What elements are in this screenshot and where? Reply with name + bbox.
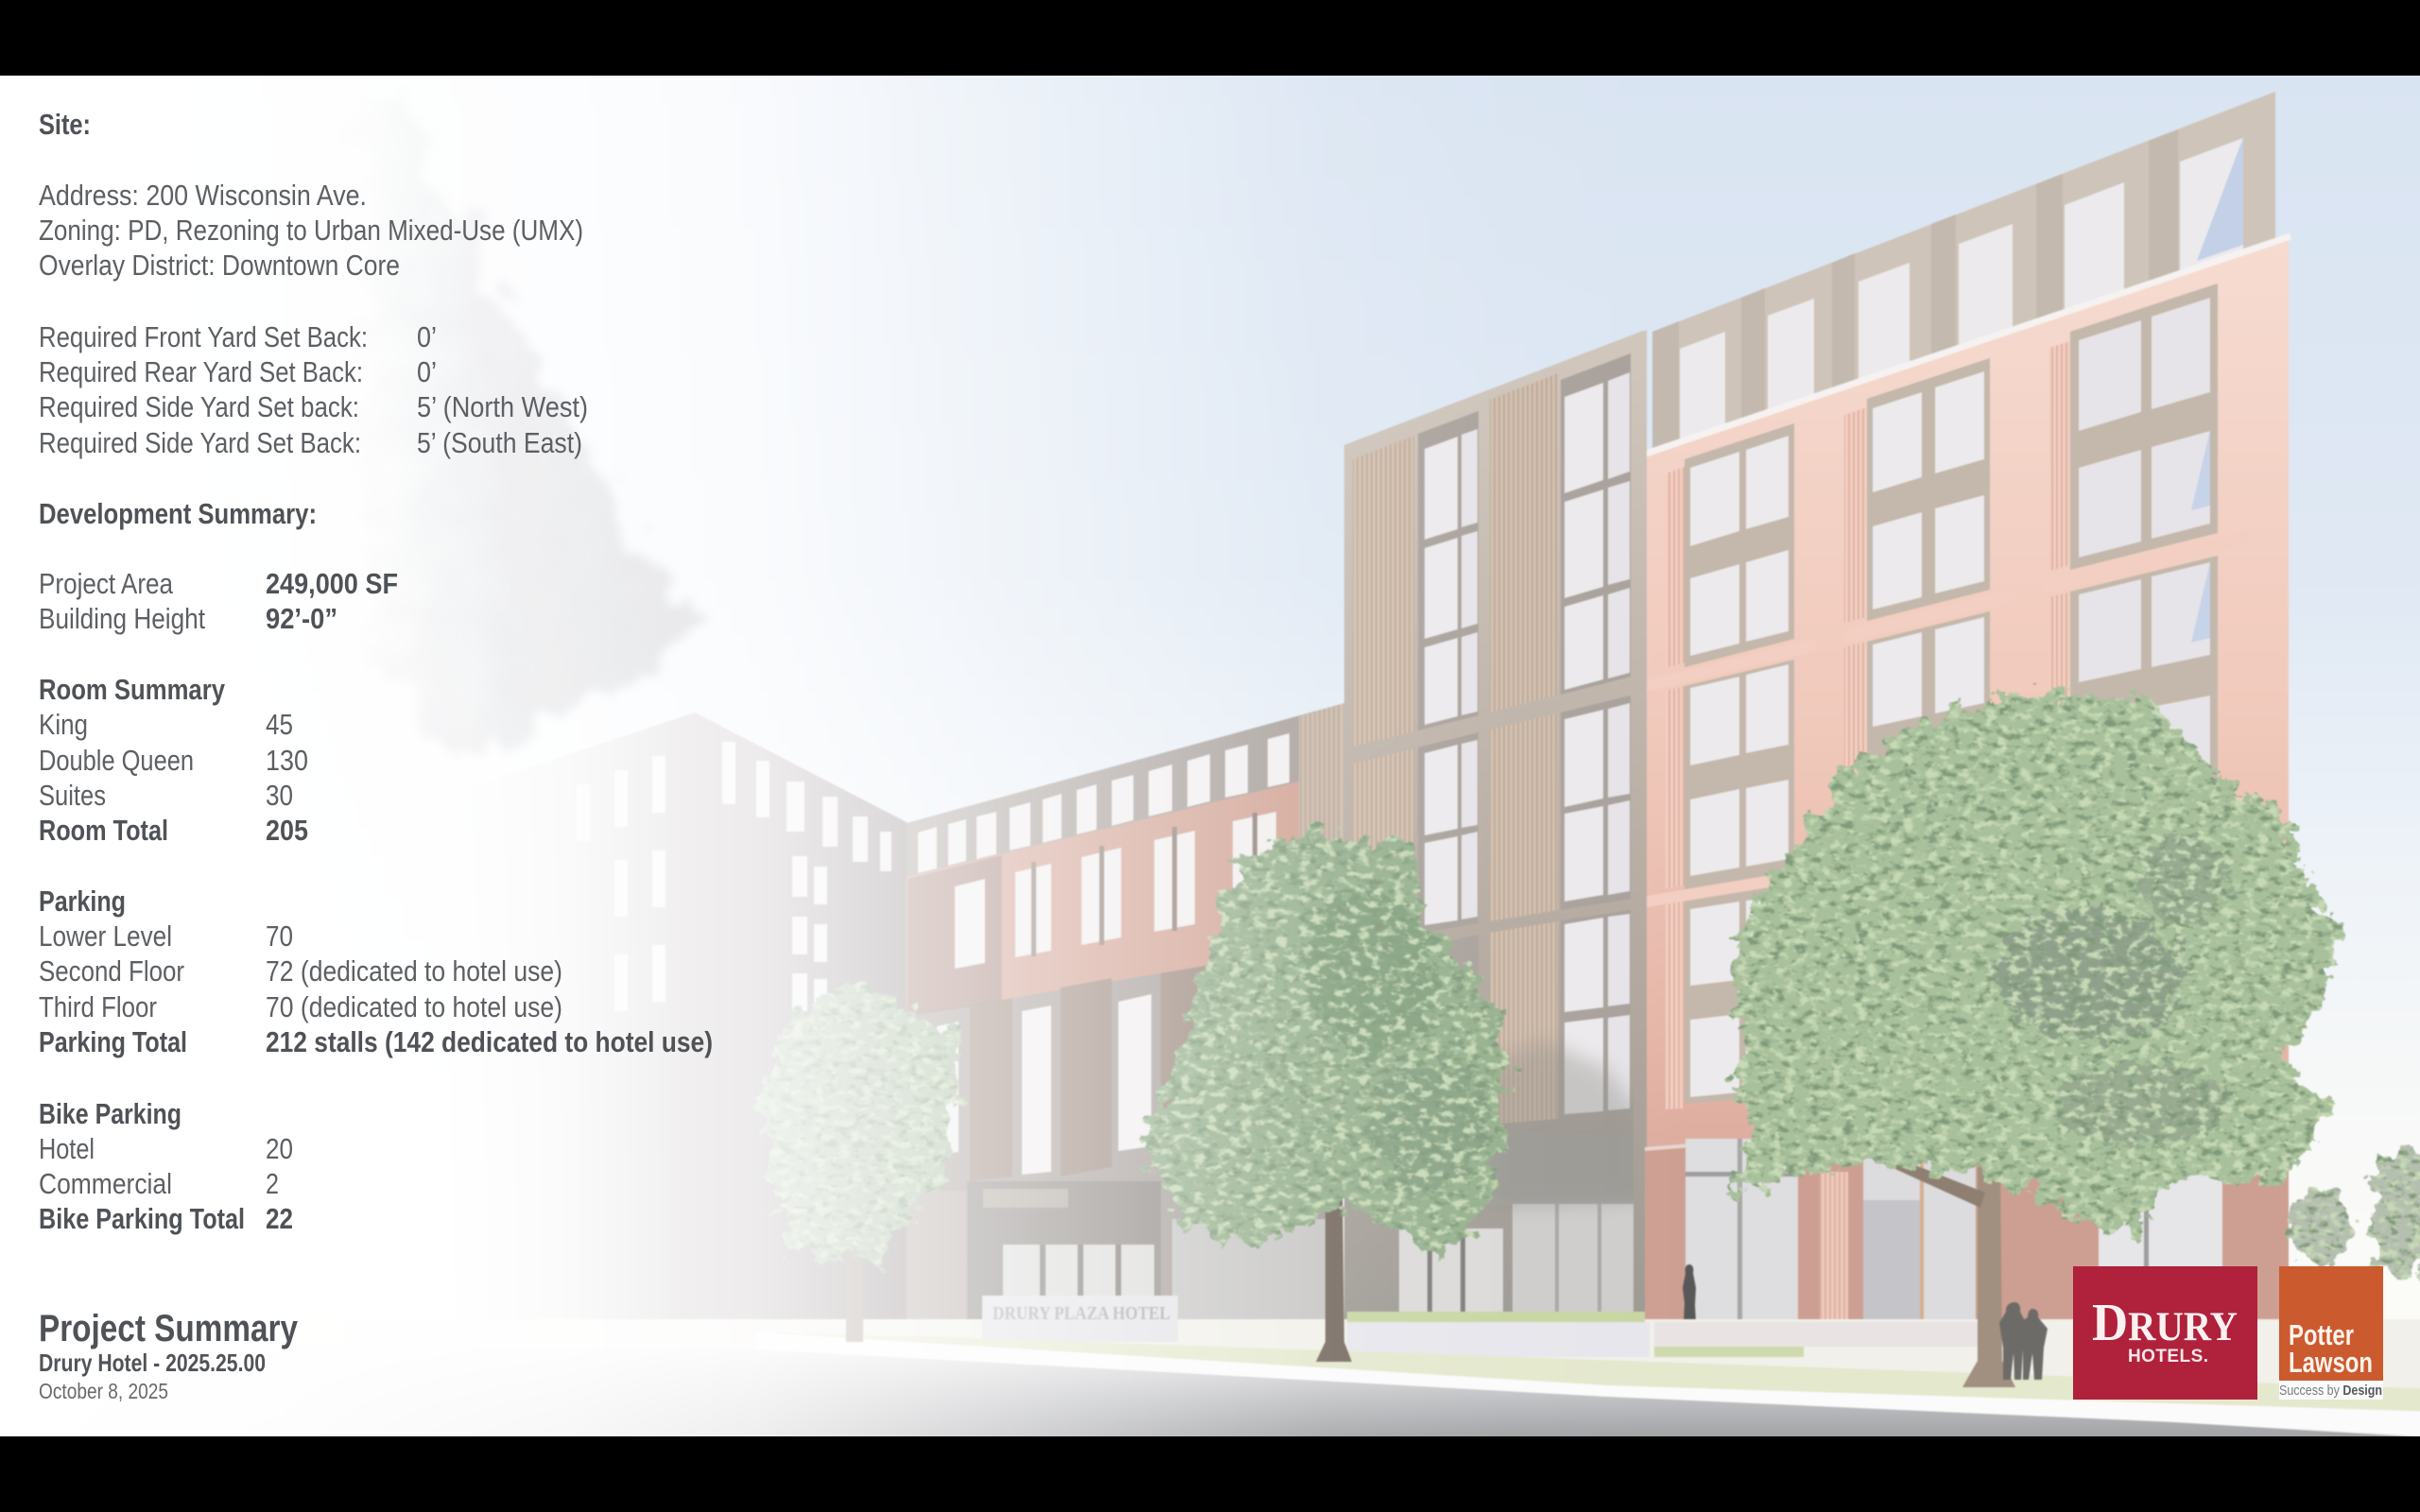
text: development summary [39, 497, 713, 1235]
tower shadow [1484, 1040, 1643, 1210]
parking summary: 212 stalls (142 dedicated to hotel use) [266, 1025, 713, 1058]
setbacks: 0’ [417, 320, 437, 353]
bottom black bar [0, 1436, 2420, 1512]
facade bands [1647, 530, 2248, 907]
logo: Potter Lawson [2279, 1266, 2383, 1400]
road [0, 1342, 2420, 1455]
penthouse band [1652, 92, 2275, 454]
facade ribbed strips [1666, 341, 2070, 1109]
tower windows [1425, 372, 1630, 1114]
setbacks: 0’ [417, 355, 437, 388]
address block [39, 179, 583, 282]
ground floor glazing [1685, 1139, 2222, 1319]
address block: Overlay District: Downtown Core [39, 249, 400, 282]
bike parking summary: Bike Parking Total [39, 1202, 245, 1235]
facade frames [1685, 284, 2218, 1104]
penthouse ribbed strips [1652, 129, 2178, 452]
project metrics [39, 567, 398, 635]
facade windows left column [1690, 436, 1789, 1097]
logo: Drury Hotels: HOTELS. [2128, 1347, 2208, 1366]
planter walls [1347, 1322, 1650, 1357]
wing brick windows [955, 812, 1276, 969]
setbacks: Required Side Yard Set back: [39, 390, 359, 423]
logo: Potter Lawson: Lawson [2289, 1346, 2373, 1379]
bike parking summary: 22 [266, 1202, 293, 1235]
ground plane [0, 1296, 2420, 1455]
room summary: King [39, 708, 88, 741]
mid-left tree [756, 982, 961, 1342]
project metrics: 92’-0” [266, 602, 337, 635]
sidewalk stripe [756, 1332, 2420, 1436]
large foreground tree [1726, 692, 2343, 1387]
address block: Address: 200 Wisconsin Ave. [39, 179, 367, 212]
room summary [39, 673, 308, 847]
parking summary: Parking [39, 885, 126, 918]
tower ribbed panels [1353, 373, 1558, 1136]
person silhouette [1683, 1264, 1696, 1322]
entrance canopy and storefront [907, 1181, 1333, 1319]
date: October 8, 2025 [39, 1379, 168, 1403]
left hotel wing [907, 703, 1344, 1319]
setbacks: Required Rear Yard Set Back: [39, 355, 363, 388]
central tan tower [1344, 331, 1643, 1319]
parking summary: Parking Total [39, 1025, 187, 1058]
bike parking summary [39, 1097, 293, 1235]
room summary: 30 [266, 779, 293, 812]
sign text: DRURY PLAZA HOTEL [993, 1303, 1170, 1324]
penthouse windows [1680, 138, 2243, 442]
bike parking summary: 2 [266, 1167, 279, 1200]
room summary: Suites [39, 779, 106, 812]
setbacks: Required Side Yard Set Back: [39, 426, 361, 459]
bike parking summary: 20 [266, 1132, 293, 1165]
parking summary: Lower Level [39, 919, 172, 953]
bike parking summary: Bike Parking [39, 1097, 182, 1130]
room summary: 205 [266, 814, 308, 847]
subtitle: Drury Hotel - 2025.25.00 [39, 1349, 266, 1377]
logo: Drury Hotels [2073, 1266, 2257, 1400]
setbacks: 5’ (North West) [417, 390, 588, 423]
setbacks: Required Front Yard Set Back: [39, 320, 368, 353]
project metrics: 249,000 SF [266, 567, 398, 600]
project title block [39, 1308, 299, 1403]
bike parking summary: Commercial [39, 1167, 172, 1200]
text: site information [39, 108, 588, 459]
tower window frames [1418, 353, 1631, 1130]
room summary: 45 [266, 708, 293, 741]
development heading: Development Summary: [39, 497, 317, 530]
setbacks: 5’ (South East) [417, 426, 582, 459]
logo: Potter Lawson: Potter [2289, 1318, 2354, 1351]
bike parking summary: Hotel [39, 1132, 95, 1165]
top black bar [0, 0, 2420, 76]
parking summary: 70 (dedicated to hotel use) [266, 990, 562, 1023]
tower pier [1634, 330, 1647, 1319]
room summary: Room Total [39, 814, 168, 847]
address block: Zoning: PD, Rezoning to Urban Mixed-Use (UMX) [39, 214, 583, 247]
ribbed tan corner piece [1299, 703, 1344, 1040]
ghost tree silhouette [359, 85, 684, 756]
lawn strip [756, 1332, 2420, 1412]
tower storefront [1352, 1134, 1635, 1315]
pedestrians [1999, 1302, 2048, 1380]
parking summary: Second Floor [39, 954, 184, 988]
room summary: Room Summary [39, 673, 226, 706]
parking summary [39, 885, 713, 1058]
parking summary: 72 (dedicated to hotel use) [266, 954, 562, 988]
site heading: Site: [39, 108, 91, 141]
cornice [1643, 236, 2290, 455]
center tree [1142, 832, 1510, 1362]
room summary: 130 [266, 744, 308, 777]
wing ribbed panels and lower windows [937, 966, 1205, 1181]
facade windows middle column [1873, 371, 1984, 963]
room summary: Double Queen [39, 744, 194, 777]
far trees right [2287, 1148, 2420, 1280]
project metrics: Project Area [39, 567, 174, 600]
brick hotel facade [1634, 236, 2290, 1322]
title: Project Summary [39, 1308, 299, 1349]
parking summary: Third Floor [39, 990, 157, 1023]
facade windows right column [2079, 298, 2210, 810]
wing penthouse windows [918, 733, 1289, 873]
project metrics: Building Height [39, 602, 205, 635]
sign block [982, 1296, 1178, 1342]
ground floor brick [1645, 1096, 2289, 1319]
far building wing [447, 713, 907, 1319]
setbacks [39, 320, 588, 459]
logo: Potter Lawson: Success by Design [2279, 1383, 2382, 1399]
logo: Drury Hotels: DRURY [2092, 1294, 2238, 1352]
parking summary: 70 [266, 919, 293, 953]
